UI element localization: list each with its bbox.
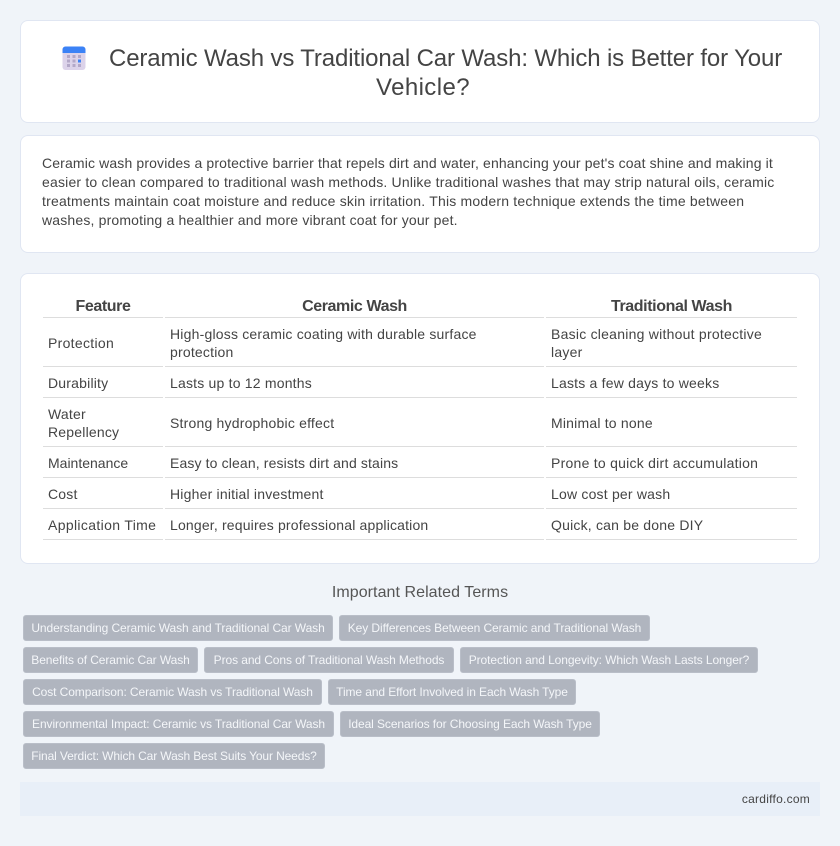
tag: Pros and Cons of Traditional Wash Methods xyxy=(214,653,444,667)
tag: Ideal Scenarios for Choosing Each Wash Type xyxy=(348,717,592,731)
comparison table: protection xyxy=(170,344,233,360)
tag xyxy=(339,615,650,641)
tag: Protection and Longevity: Which Wash Lasts Longer? xyxy=(469,653,749,667)
comparison table: Longer, requires professional application xyxy=(170,517,428,533)
row: application time: Application Time xyxy=(48,517,156,533)
panel: intro xyxy=(20,135,820,253)
heading: important related terms: Important Related Terms xyxy=(332,584,508,601)
comparison table: Quick, can be done DIY xyxy=(551,517,703,533)
tag xyxy=(23,711,334,737)
title: Vehicle? xyxy=(376,74,470,101)
comparison table: Minimal to none xyxy=(551,415,653,431)
intro text: easier to clean compared to traditional wash methods. Unlike traditional washes that may strip natural oils, ceramic xyxy=(42,174,774,190)
intro text: treatments maintain coat moisture and reduce skin irritation. This modern technique extends the time between xyxy=(42,193,744,209)
row: water repellency xyxy=(48,406,119,440)
tag xyxy=(23,647,198,673)
footer source: cardiffo.com xyxy=(742,792,810,806)
row: maintenance: Maintenance xyxy=(48,455,128,471)
intro text: washes, promoting a healthier and more vibrant coat for your pet. xyxy=(42,212,458,228)
tag: Final Verdict: Which Car Wash Best Suits Your Needs? xyxy=(31,749,317,763)
comparison table: Strong hydrophobic effect xyxy=(170,415,334,431)
tag xyxy=(204,647,454,673)
row: water repellency: Repellency xyxy=(48,424,119,440)
intro text: Ceramic wash provides a protective barrier that repels dirt and water, enhancing your pet's coat shine and making it xyxy=(42,155,773,171)
row: water repellency: Water xyxy=(48,406,86,422)
row: durability: Durability xyxy=(48,375,108,391)
header: feature: Feature xyxy=(76,298,130,315)
tag: Understanding Ceramic Wash and Traditional Car Wash xyxy=(31,621,325,635)
tag xyxy=(460,647,758,673)
comparison table: Lasts a few days to weeks xyxy=(551,375,719,391)
header: ceramic wash: Ceramic Wash xyxy=(302,298,407,315)
panel: header xyxy=(20,20,820,123)
header: traditional wash: Traditional Wash xyxy=(611,298,732,315)
tag xyxy=(23,679,322,705)
comparison table: Lasts up to 12 months xyxy=(170,375,312,391)
tag xyxy=(23,743,325,769)
title: Ceramic Wash vs Traditional Car Wash: Which is Better for Your xyxy=(109,45,782,72)
tag: Benefits of Ceramic Car Wash xyxy=(31,653,190,667)
footer bar xyxy=(20,782,820,816)
tag: Cost Comparison: Ceramic Wash vs Traditional Wash xyxy=(32,685,313,699)
tag: Environmental Impact: Ceramic vs Traditional Car Wash xyxy=(32,717,325,731)
intro text xyxy=(42,155,774,228)
tag: Key Differences Between Ceramic and Traditional Wash xyxy=(348,621,641,635)
panel: comparison table xyxy=(20,273,820,564)
comparison table: Prone to quick dirt accumulation xyxy=(551,455,758,471)
tag xyxy=(340,711,600,737)
tag xyxy=(328,679,576,705)
comparison table: Low cost per wash xyxy=(551,486,670,502)
comparison table: layer xyxy=(551,344,583,360)
row: cost: Cost xyxy=(48,486,78,502)
row: protection: Protection xyxy=(48,335,114,351)
comparison table: High-gloss ceramic coating with durable surface xyxy=(170,326,477,342)
icon: calendar xyxy=(62,46,86,70)
tag xyxy=(23,615,333,641)
comparison table: Higher initial investment xyxy=(170,486,324,502)
comparison table: Easy to clean, resists dirt and stains xyxy=(170,455,398,471)
comparison table: Basic cleaning without protective xyxy=(551,326,762,342)
title xyxy=(109,45,782,101)
tag: Time and Effort Involved in Each Wash Type xyxy=(336,685,568,699)
